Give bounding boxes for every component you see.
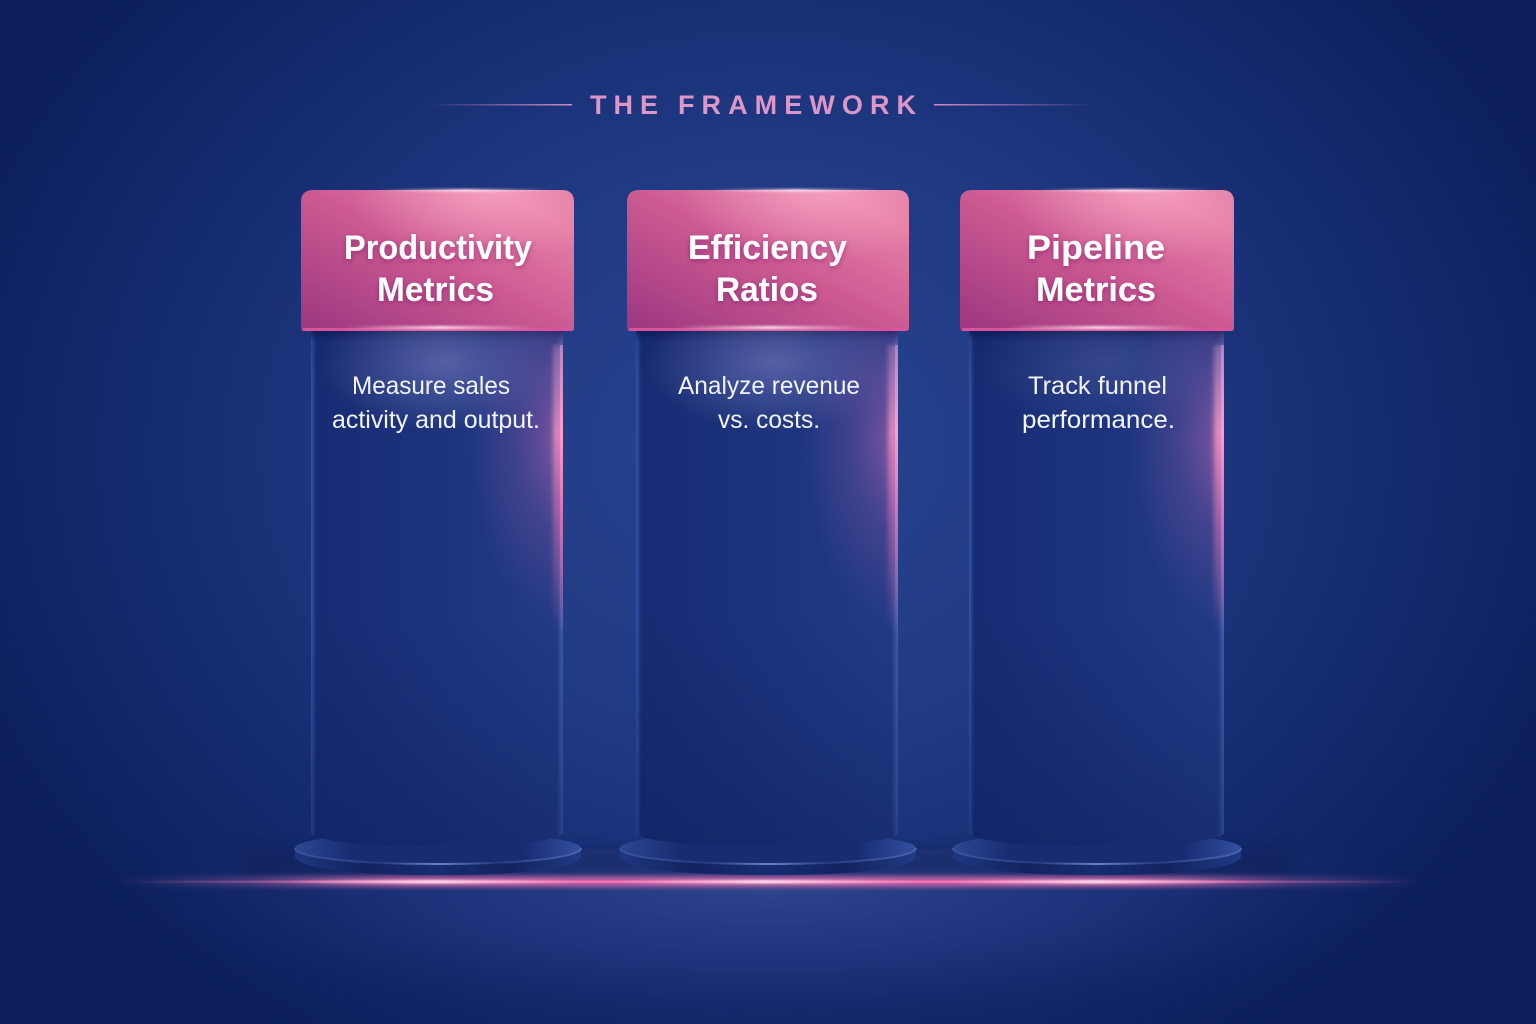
description 3: Track funnel: [1028, 372, 1167, 400]
description 3: [1022, 372, 1175, 434]
description 1: [332, 372, 540, 434]
column 3: Pipeline Metrics: [952, 187, 1242, 875]
floor glow line: [120, 848, 1420, 887]
title: FRAMEWORK: [678, 90, 916, 120]
heading 3: Metrics: [1036, 271, 1156, 309]
title: THE: [590, 90, 658, 120]
cap 2: [627, 189, 909, 331]
description 1: activity and output.: [332, 406, 540, 434]
cap 3: [960, 189, 1234, 331]
base 3: [953, 832, 1241, 875]
description 2: vs. costs.: [718, 406, 820, 434]
pillar body 1: [311, 331, 563, 842]
heading 1: Productivity: [344, 229, 532, 267]
column 1: Productivity Metrics: [294, 187, 582, 875]
base 2: [620, 832, 916, 875]
description 2: [678, 372, 860, 434]
title: [430, 90, 1094, 120]
heading 3: Pipeline: [1027, 229, 1165, 267]
heading 1: [344, 229, 532, 309]
description 1: Measure sales: [352, 372, 510, 400]
heading 2: Efficiency: [688, 229, 847, 267]
heading 2: Ratios: [716, 271, 818, 309]
pillar body 3: [969, 331, 1224, 842]
pillar body 2: [636, 331, 898, 842]
description 2: Analyze revenue: [678, 372, 860, 400]
heading 3: [1027, 229, 1165, 309]
heading 1: Metrics: [377, 271, 494, 309]
column 2: Efficiency Ratios: [619, 187, 917, 875]
base 1: [295, 832, 581, 875]
heading 2: [688, 229, 847, 309]
cap 1: [301, 189, 574, 331]
description 3: performance.: [1022, 406, 1175, 434]
